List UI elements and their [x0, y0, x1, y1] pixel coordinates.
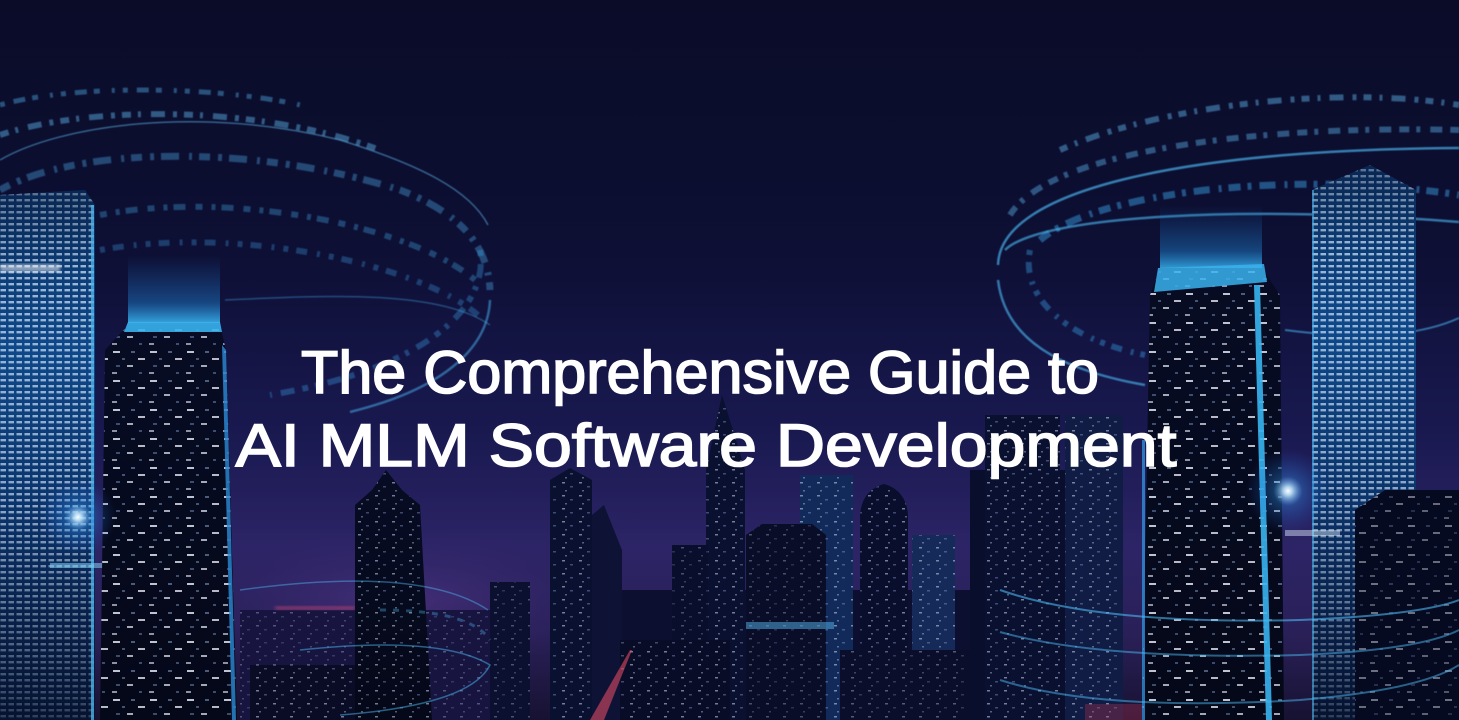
lower left light rings	[240, 581, 490, 715]
left pale tower	[0, 190, 120, 720]
title line 2: AI MLM Software Development	[236, 412, 1177, 479]
lower right light rings	[1000, 590, 1459, 703]
right pale tower	[1285, 165, 1416, 720]
right data ring	[998, 97, 1459, 385]
light flare: right	[1246, 449, 1330, 533]
mid-ground towers	[250, 395, 1145, 720]
title line 1: The Comprehensive Guide to	[301, 339, 1099, 406]
right dark tower	[1142, 205, 1284, 720]
left dark tower	[100, 255, 237, 720]
distant city skyline	[240, 590, 970, 720]
light flare: left	[40, 479, 116, 555]
title	[236, 339, 1177, 479]
left data ring	[0, 90, 490, 412]
right lower dark tower	[1355, 490, 1459, 720]
